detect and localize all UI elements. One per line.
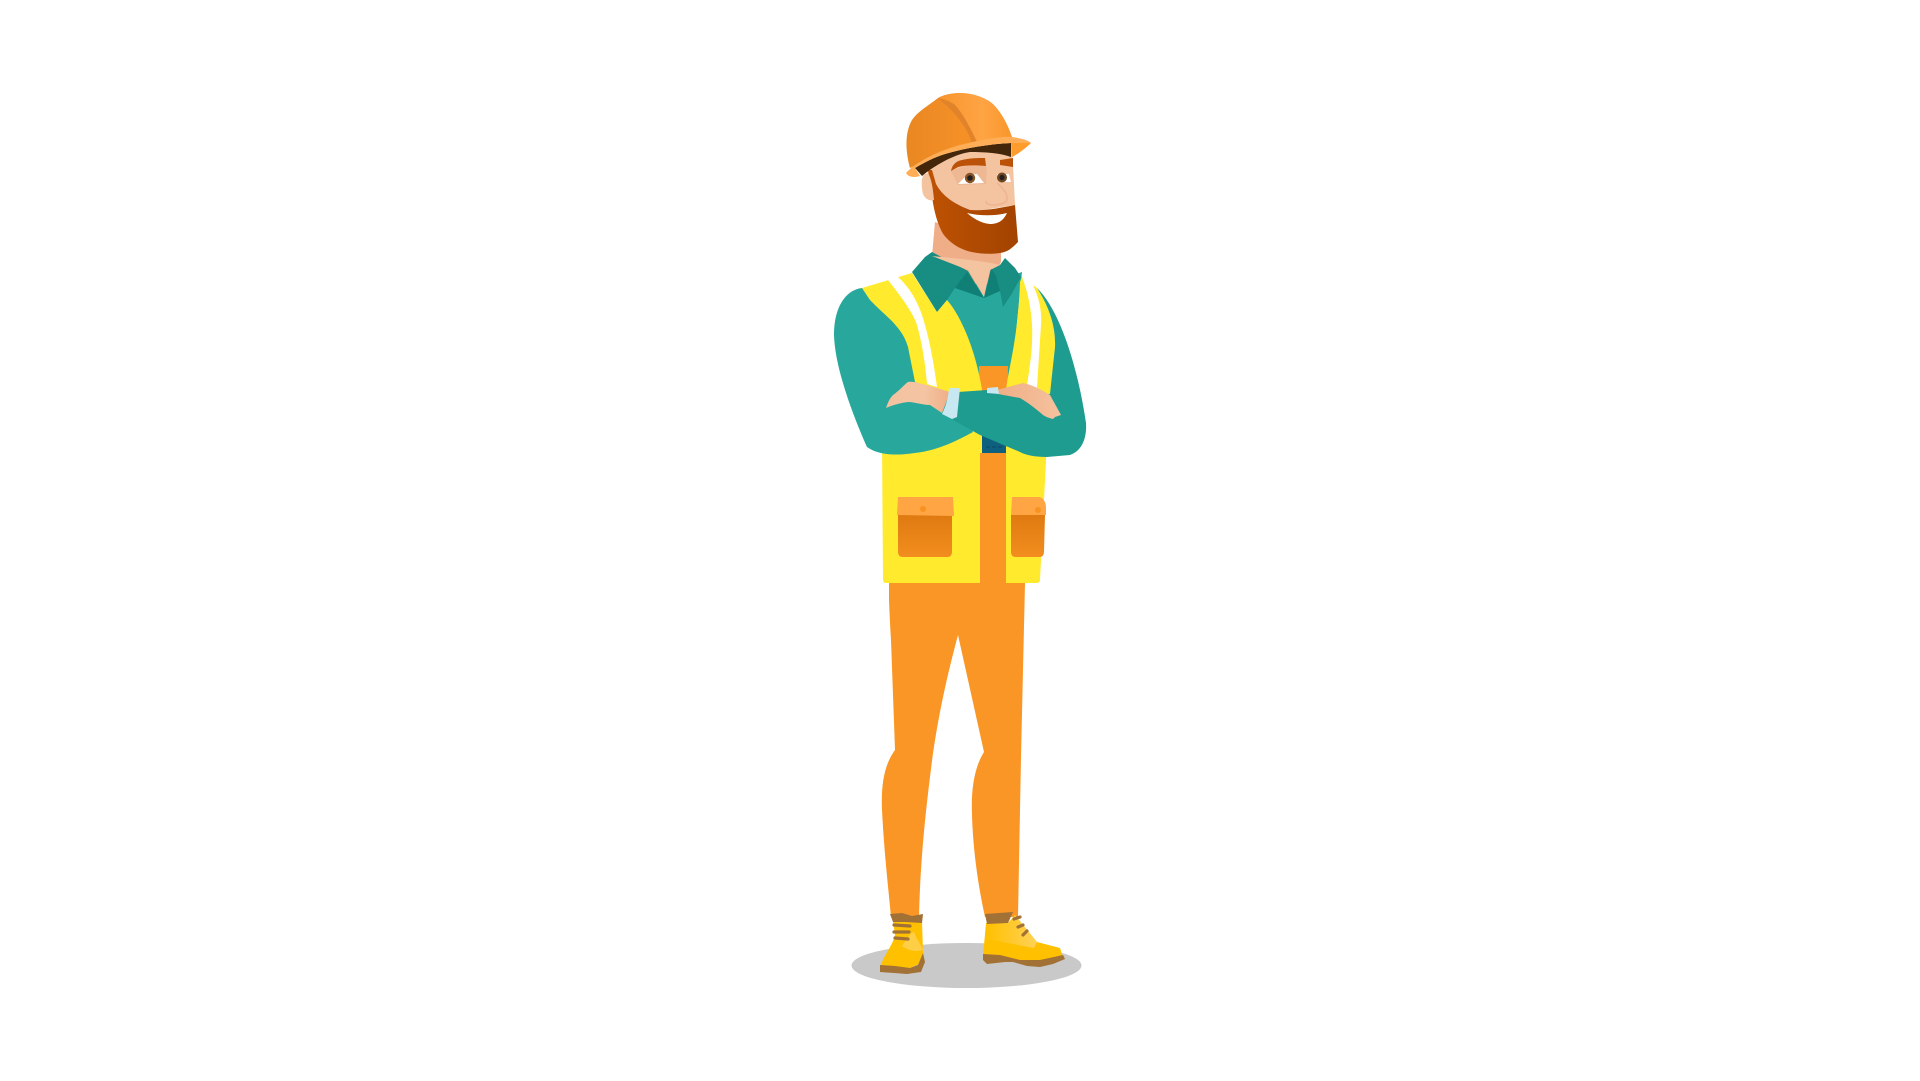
right cuff	[987, 387, 999, 394]
smile	[967, 213, 1007, 224]
ear	[922, 173, 934, 200]
right eyebrow	[1000, 158, 1013, 167]
worker figure	[834, 93, 1086, 988]
left eyebrow	[951, 158, 986, 171]
right boot	[983, 912, 1065, 967]
beard	[928, 170, 1018, 254]
orange centre strip	[979, 366, 1008, 583]
right eye	[997, 172, 1011, 182]
left boot	[880, 913, 925, 974]
left cuff	[942, 388, 960, 419]
eye shadow	[951, 165, 987, 185]
vest: right pocket	[1011, 497, 1046, 557]
left eye	[958, 173, 984, 184]
vest: reflective stripes	[888, 277, 1041, 388]
shirt chest	[940, 272, 1022, 392]
right hand	[997, 383, 1061, 419]
right sleeve	[953, 288, 1086, 457]
neck	[932, 222, 1001, 298]
ground shadow	[852, 943, 1082, 988]
face	[926, 143, 1015, 212]
left hand	[886, 382, 950, 413]
trousers	[882, 583, 1025, 917]
vest: right panel	[1006, 277, 1055, 583]
vest: left pocket	[897, 497, 954, 557]
vest: left panel	[862, 273, 982, 583]
hard hat	[906, 93, 1031, 177]
nose	[986, 183, 1007, 205]
left sleeve	[834, 288, 973, 455]
collar	[912, 252, 1021, 312]
belt	[981, 430, 1007, 453]
